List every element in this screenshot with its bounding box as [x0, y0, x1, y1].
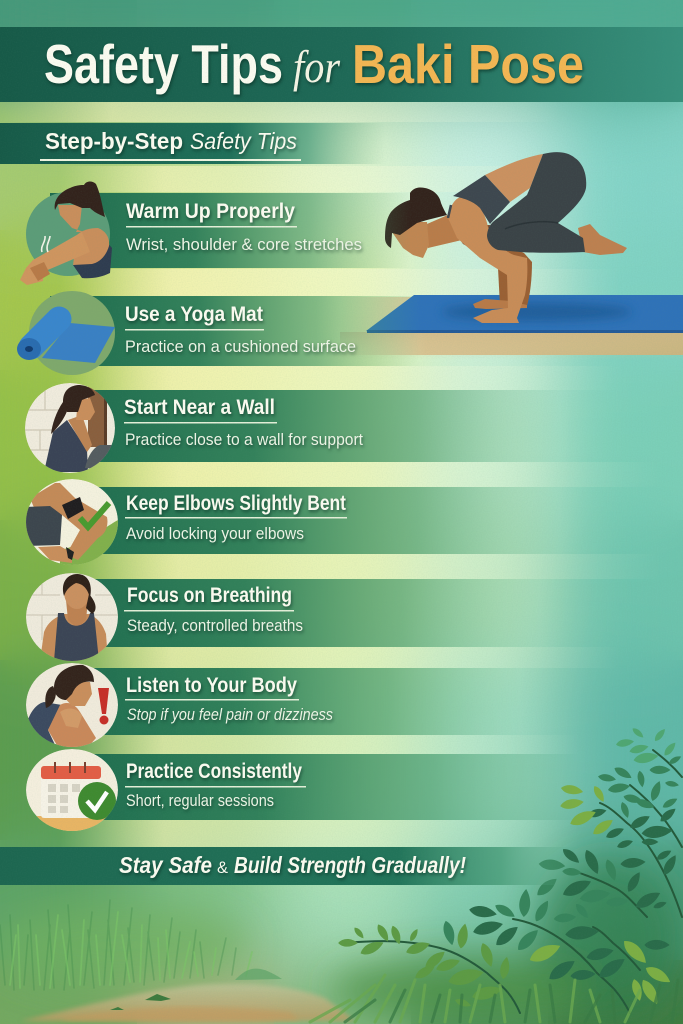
- title banner: [0, 27, 683, 102]
- tip 5: breathing: Focus on Breathing: [127, 584, 292, 607]
- bright leaves: [527, 784, 673, 1007]
- tip 6: listen to body: [26, 663, 520, 747]
- bottom scenery: dirt path: [20, 984, 355, 1021]
- section heading: step-by-step: [0, 123, 385, 164]
- tip 4: elbows: Keep Elbows Slightly Bent: [126, 492, 346, 515]
- icon: bent elbow with check mark: [26, 479, 118, 565]
- tip 6: listen to body: Stop if you feel pain or dizziness: [127, 706, 333, 724]
- tip 1: warm up: Warm Up Properly: [126, 200, 295, 223]
- bottom scenery: foliage shade: [0, 860, 682, 1022]
- section heading: step-by-step: Safety Tips: [190, 128, 297, 154]
- closing banner: Stay Safe: [119, 852, 212, 878]
- tip 3: near a wall: Practice close to a wall for support: [125, 431, 363, 449]
- pale top leaves: [615, 726, 678, 765]
- closing banner: [0, 847, 570, 885]
- illustration: woman in crow pose: [385, 152, 627, 323]
- foot: [578, 224, 627, 255]
- icon: rolled yoga mat: [17, 291, 115, 375]
- tip 7: consistency: Practice Consistently: [126, 760, 302, 783]
- ground blades: [310, 975, 678, 1022]
- tip 1: warm up: Wrist, shoulder & core stretches: [126, 236, 362, 254]
- hair: [385, 188, 447, 248]
- icon: woman seated by wall: [25, 383, 115, 473]
- floor and yoga mat: [340, 295, 683, 360]
- tip 2: yoga mat: [17, 291, 420, 375]
- tip 5: breathing: Steady, controlled breaths: [127, 617, 303, 635]
- torso skin: [485, 154, 543, 202]
- title text: Safety Tips: [44, 33, 283, 95]
- far arm and hand: [498, 245, 532, 306]
- tip 2: yoga mat: Use a Yoga Mat: [125, 303, 263, 326]
- neck: [427, 214, 462, 248]
- sports top: [453, 175, 510, 224]
- tip 7: consistency: [26, 749, 580, 832]
- tip 1: warm up: [20, 181, 410, 285]
- olive leaves of the low branch: [338, 923, 511, 1009]
- mid-green leaves: [441, 754, 682, 954]
- icon: woman stretching wrists: [20, 181, 112, 285]
- bottom scenery: grass: [0, 900, 252, 990]
- tip 4: elbows: [26, 479, 560, 565]
- bottom scenery: leafy plants: [310, 726, 682, 1022]
- under-body shade: [450, 225, 510, 255]
- plant stems: [345, 750, 682, 1013]
- tip 7: consistency: Short, regular sessions: [126, 792, 274, 810]
- section heading: step-by-step: Step-by-Step: [45, 128, 183, 154]
- near arm and shoulder: [448, 197, 527, 323]
- face: [392, 222, 429, 258]
- title banner: Baki Pose: [352, 33, 584, 95]
- closing banner: Build Strength Gradually!: [234, 852, 466, 878]
- title banner: for: [293, 41, 341, 92]
- icon: calendar with check badge: [26, 749, 118, 832]
- tip 4: elbows: Avoid locking your elbows: [126, 525, 304, 543]
- tip 3: near a wall: [25, 383, 560, 473]
- icon: woman holding shoulder with warning: [26, 663, 118, 747]
- tip 3: near a wall: Start Near a Wall: [124, 396, 275, 419]
- icon: woman breathing calmly: [26, 573, 118, 661]
- leggings: [487, 152, 586, 253]
- dark leaves: [468, 806, 679, 984]
- closing banner: &: [217, 858, 229, 877]
- tip 5: breathing: [26, 573, 540, 661]
- tip 6: listen to body: Listen to Your Body: [126, 674, 297, 697]
- tip 2: yoga mat: Practice on a cushioned surface: [125, 338, 356, 356]
